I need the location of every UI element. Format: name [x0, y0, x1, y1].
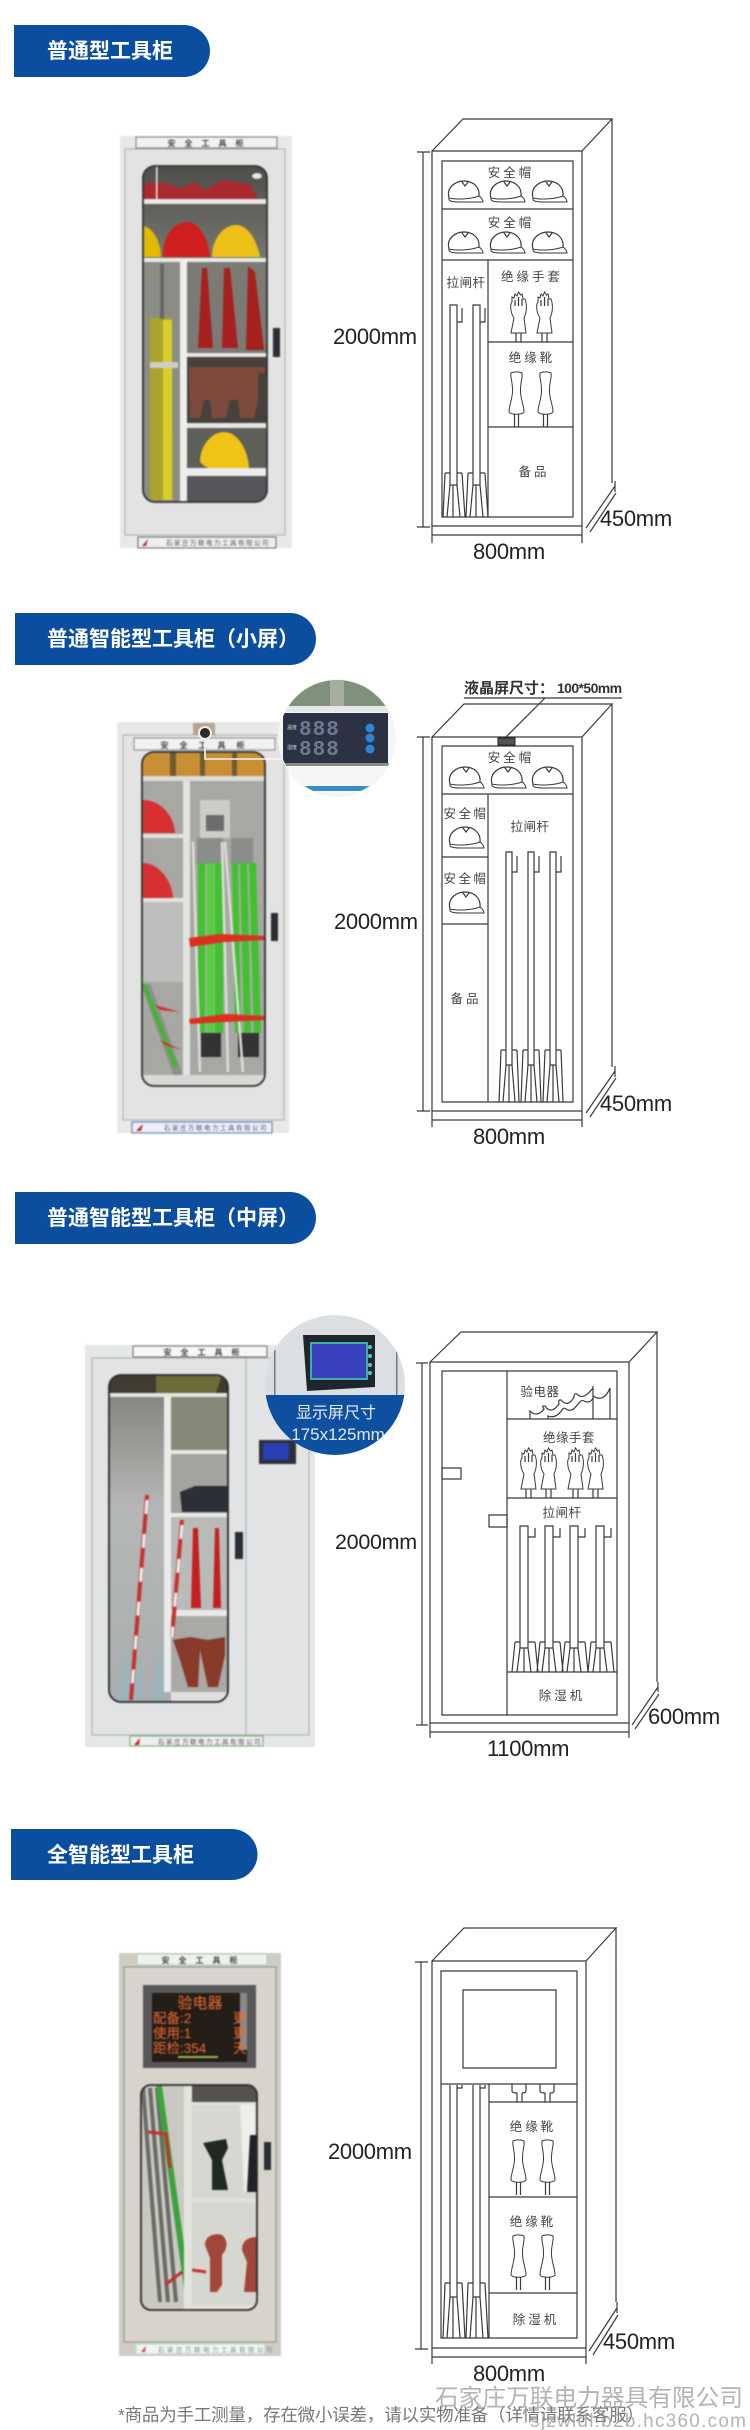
photo: 中屏工具柜实物: 石家庄万联电力工具有限公司: [158, 1737, 262, 1746]
label: 温度: 温度: [287, 724, 297, 731]
heading: 普通智能型工具柜（中屏）: 普通智能型工具柜（中屏）: [47, 1207, 299, 1230]
panel: 普通智能型工具柜（中屏）: [15, 1192, 720, 1761]
label: 液晶屏尺寸: 100*50mm: [557, 680, 622, 696]
icon: 摄像头 / 连接线: [199, 727, 282, 759]
LED line: 配备:2: [153, 2010, 191, 2026]
LED line: 距检:354: [153, 2041, 207, 2056]
photo: 普通型工具柜实物: 石家庄万联电力工具有限公司: [166, 538, 270, 547]
screen: LED 显示屏: [152, 1993, 247, 2062]
heading: 普通型工具柜: 普通型工具柜: [47, 40, 173, 63]
drawing: 中屏工具柜线框图: [335, 1332, 720, 1761]
label: 绝缘手套: 绝缘手套: [501, 269, 563, 284]
heading: 全智能型工具柜: [11, 1829, 258, 1880]
label: 除湿机: 除湿机: [513, 2312, 559, 2327]
label: 液晶屏尺寸: 液晶屏尺寸：: [464, 679, 554, 697]
label: 湿度: 湿度: [287, 744, 297, 751]
watermark: 公司名: 石家庄万联电力器具有限公司: [435, 2385, 743, 2412]
photo: 中屏工具柜实物: [85, 1345, 315, 1747]
drawing: 小屏工具柜线框图: [334, 679, 672, 1149]
dimension: 2000mm: 2000mm: [334, 909, 418, 934]
photo: 普通型工具柜实物: 安全工具柜: [168, 138, 252, 148]
photo: 小屏工具柜实物: 石家庄万联电力工具有限公司: [164, 1123, 268, 1132]
label: 备品: 备品: [518, 465, 550, 479]
photo: 全智能工具柜实物: 安全工具柜: [162, 1955, 246, 1965]
footnote: *商品为手工测量，存在微小误差，请以实物准备（详情请联系客服）: [118, 2405, 644, 2425]
label: 安全帽: 安全帽: [488, 215, 534, 230]
dimension: 450mm: 450mm: [603, 2329, 675, 2354]
label: 除湿机: 除湿机: [539, 1688, 585, 1703]
LED unit: 更: [233, 2011, 247, 2026]
photo: 普通型工具柜实物: [120, 136, 292, 548]
display: 888 数码管: 888: [299, 719, 340, 742]
label: 175x125mm: 175x125mm: [291, 1425, 385, 1444]
LED line: 使用:1: [153, 2025, 191, 2041]
LED unit: 天: [233, 2041, 247, 2056]
dimension: 2000mm: 2000mm: [335, 1530, 417, 1554]
photo: 全智能工具柜实物: [119, 1953, 281, 2356]
dimension: 600mm: 600mm: [648, 1704, 720, 1729]
panel: 普通型工具柜: [14, 25, 672, 564]
heading: 普通智能型工具柜（小屏）: [15, 613, 316, 665]
label: 显示屏尺寸: 显示屏尺寸: [296, 1404, 376, 1422]
heading: 普通智能型工具柜（小屏）: 普通智能型工具柜（小屏）: [47, 628, 299, 651]
dimension: 800mm: 800mm: [473, 539, 545, 564]
photo: 全智能工具柜实物: 石家庄万联电力工具有限公司: [158, 2345, 275, 2354]
label: 安全帽: 安全帽: [443, 871, 489, 886]
photo: 小屏工具柜实物: 安全工具柜: [160, 740, 256, 750]
heading: 全智能型工具柜: 全智能型工具柜: [47, 1843, 194, 1867]
photo: 中屏工具柜实物: 安全工具柜: [164, 1347, 248, 1357]
panel: 全智能型工具柜: [11, 1829, 675, 2386]
label: 绝缘手套: 绝缘手套: [543, 1430, 595, 1445]
label: 拉闸杆: 拉闸杆: [446, 275, 486, 290]
label: 安全帽: 安全帽: [488, 165, 534, 180]
callout: 液晶屏放大圆: [278, 679, 398, 797]
drawing: 普通型工具柜线框图: [333, 119, 672, 564]
dimension: 800mm: 800mm: [473, 2361, 545, 2386]
panel: 普通智能型工具柜（小屏）: [15, 613, 672, 1149]
label: 绝缘靴: 绝缘靴: [509, 350, 555, 365]
label: 绝缘靴: 绝缘靴: [510, 2119, 556, 2134]
LED unit: 更: [233, 2026, 247, 2041]
label: 验电器: 验电器: [520, 1384, 560, 1399]
dimension: 2000mm: 2000mm: [328, 2139, 412, 2164]
dimension: 1100mm: 1100mm: [487, 1736, 569, 1761]
heading: 普通型工具柜: [14, 25, 210, 77]
dimension: 2000mm: 2000mm: [333, 324, 417, 349]
dimension: 800mm: 800mm: [473, 1124, 545, 1149]
label: 拉闸杆: 拉闸杆: [542, 1505, 582, 1520]
heading: 普通智能型工具柜（中屏）: [15, 1192, 316, 1244]
label: 安全帽: 安全帽: [443, 806, 489, 821]
label: 拉闸杆: 拉闸杆: [510, 819, 550, 834]
callout: 显示屏放大圆: [265, 1315, 405, 1455]
label: 液晶屏尺寸: [464, 679, 622, 738]
photo: 小屏工具柜实物: [117, 722, 289, 1133]
LED title: 验电器: [177, 1995, 223, 2012]
dimension: 450mm: 450mm: [600, 1091, 672, 1116]
label: 安全帽: 安全帽: [488, 750, 534, 765]
icon: 显示屏: [303, 1335, 375, 1391]
drawing: 全智能工具柜线框图: [328, 1928, 675, 2386]
display: 888 数码管: 888: [299, 739, 340, 762]
dimension: 450mm: 450mm: [600, 506, 672, 531]
label: 绝缘靴: 绝缘靴: [510, 2214, 556, 2229]
label: 备品: 备品: [450, 992, 482, 1006]
